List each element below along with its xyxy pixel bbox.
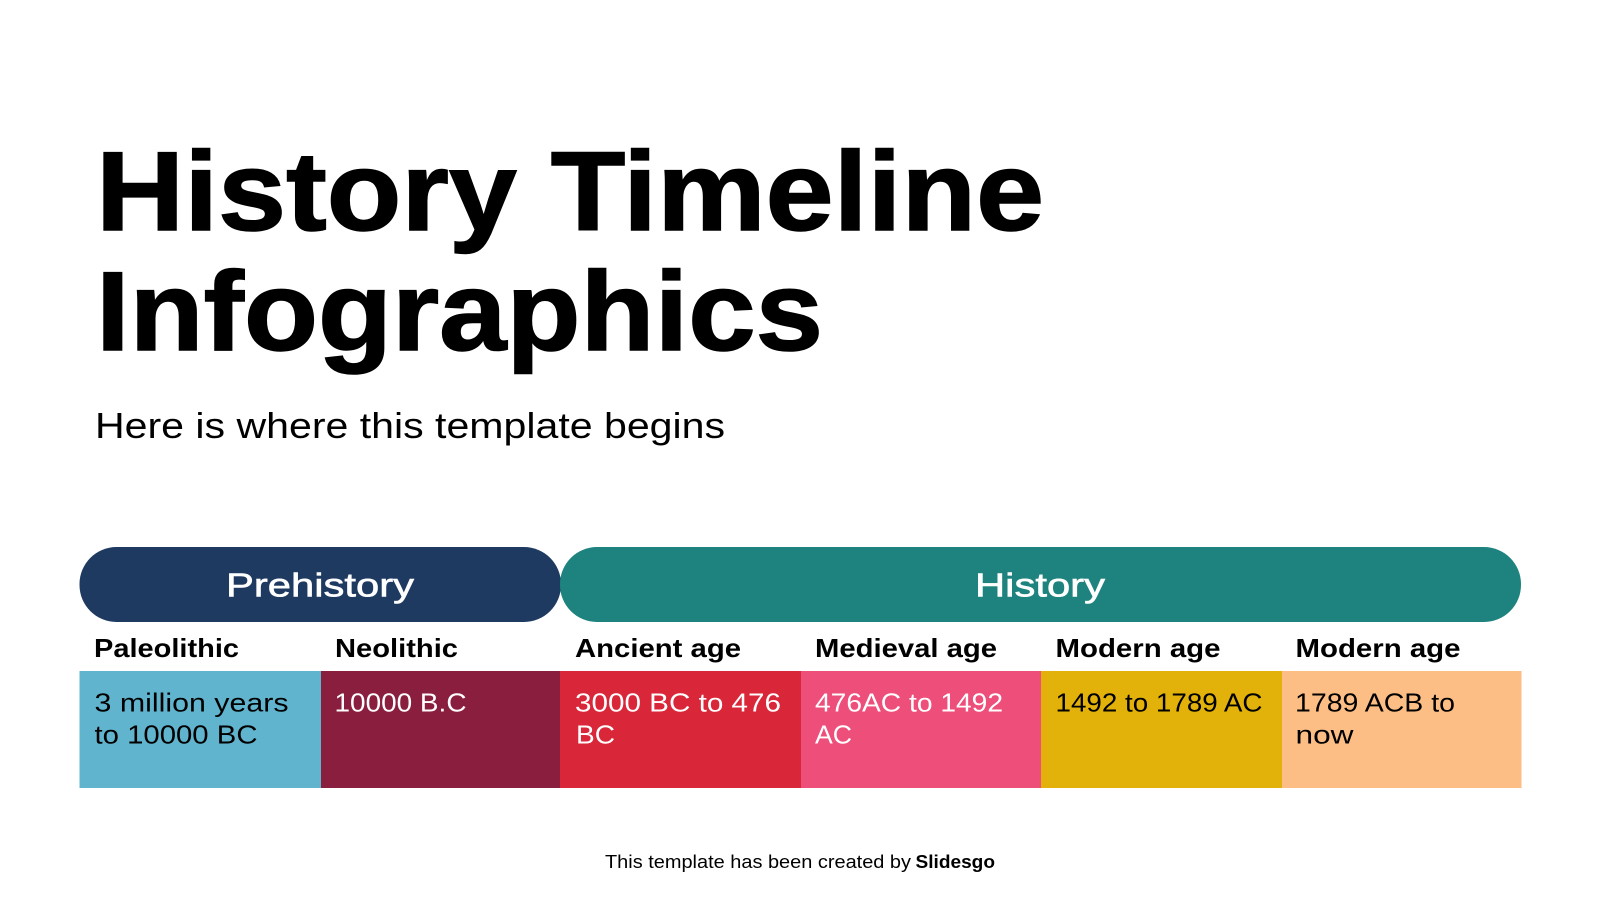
- cell: medieval age dates: [801, 671, 1041, 788]
- cell: paleolithic dates: to 10000 BC: [94, 720, 258, 750]
- period headings: Neolithic: [335, 633, 458, 663]
- cell: modern age dates: [1041, 671, 1282, 788]
- cell: modern age to now: 1789 ACB to: [1295, 688, 1455, 718]
- footer credit: Slidesgo: [916, 851, 995, 872]
- era band: prehistory: [80, 547, 561, 622]
- title: [96, 129, 1044, 374]
- cell: neolithic dates: [321, 671, 560, 788]
- period headings: [94, 633, 1460, 663]
- period headings: Modern age: [1296, 633, 1460, 663]
- footer credit: This template has been created by: [605, 851, 912, 872]
- panel: timeline table: [80, 547, 1522, 788]
- period headings: Paleolithic: [94, 633, 239, 663]
- cell: modern age to now: now: [1296, 720, 1354, 750]
- period headings: Modern age: [1056, 633, 1220, 663]
- cell: modern age dates: 1492 to 1789 AC: [1056, 688, 1262, 718]
- era band: history: [560, 547, 1521, 622]
- cell: modern age to now: [1282, 671, 1522, 788]
- era band: prehistory: Prehistory: [226, 566, 415, 604]
- title: History Timeline: [96, 129, 1044, 254]
- subtitle: Here is where this template begins: [95, 405, 725, 446]
- cell: ancient age dates: BC: [576, 720, 615, 750]
- title: Infographics: [96, 249, 823, 374]
- cell: paleolithic dates: 3 million years: [94, 688, 288, 718]
- cell: medieval age dates: AC: [815, 720, 852, 750]
- period headings: Medieval age: [815, 633, 997, 663]
- period headings: Ancient age: [575, 633, 741, 663]
- cell: medieval age dates: 476AC to 1492: [815, 688, 1003, 718]
- era band: history: History: [975, 566, 1106, 604]
- cell: ancient age dates: [560, 671, 801, 788]
- cell: neolithic dates: 10000 B.C: [334, 688, 466, 718]
- cell: ancient age dates: 3000 BC to 476: [575, 688, 781, 718]
- cell: paleolithic dates: [80, 671, 321, 788]
